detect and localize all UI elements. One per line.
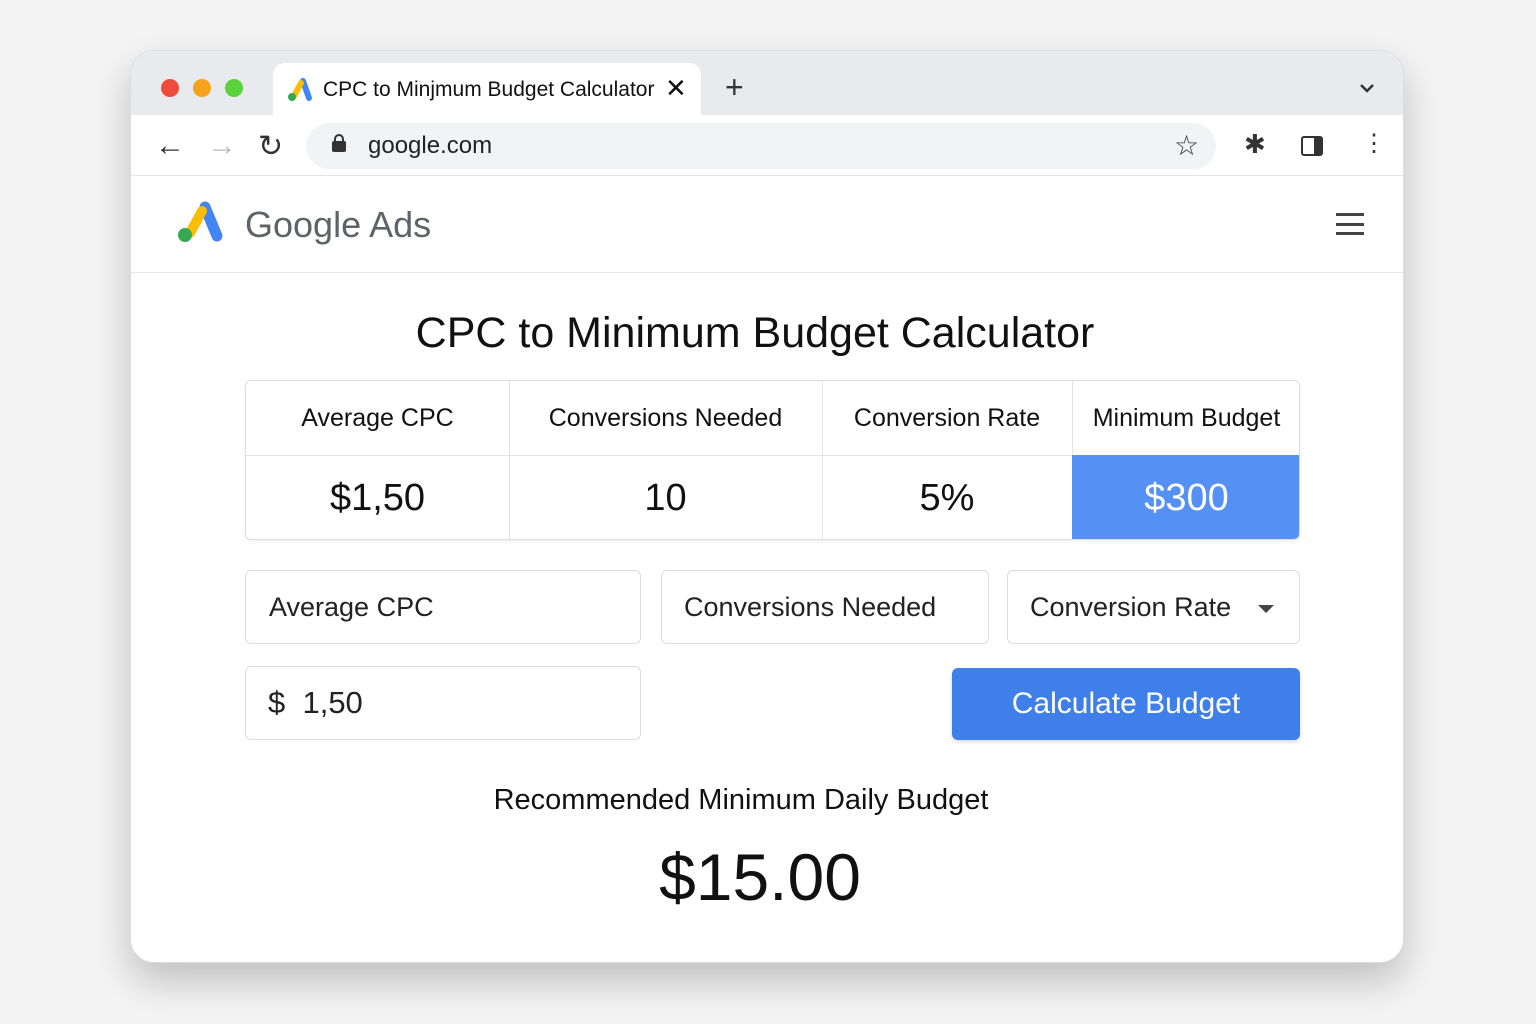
nav icons: ← bbox=[155, 129, 185, 162]
active tab bbox=[273, 63, 701, 115]
toolbar bbox=[131, 115, 1405, 176]
google ads logo bbox=[178, 202, 222, 242]
input: average cpc: Average CPC bbox=[269, 592, 434, 622]
results table bbox=[245, 380, 1300, 540]
toolbar: ⋮ bbox=[1362, 130, 1386, 157]
results table: 10 bbox=[644, 476, 687, 518]
toolbar: ↻ bbox=[258, 130, 283, 163]
dropdown: conversion rate bbox=[1007, 570, 1300, 644]
tab menu chevron bbox=[1360, 84, 1374, 93]
site header: Google Ads bbox=[245, 204, 431, 245]
results table: Conversions Needed bbox=[549, 404, 782, 432]
input: conversions needed bbox=[661, 570, 989, 644]
title: CPC to Minimum Budget Calculator bbox=[416, 308, 1094, 356]
hamburger menu bbox=[1336, 213, 1364, 235]
results table: Conversion Rate bbox=[854, 404, 1040, 432]
site header bbox=[131, 175, 1405, 273]
button: calculate budget: Calculate Budget bbox=[1012, 687, 1240, 720]
omnibox: google.com bbox=[368, 132, 492, 159]
omnibox: ☆ bbox=[1174, 130, 1199, 161]
active tab: CPC to Minjmum Budget Calculator bbox=[323, 78, 654, 101]
input: conversions needed: Conversions Needed bbox=[684, 592, 936, 622]
results table: 5% bbox=[920, 476, 974, 518]
traffic lights bbox=[161, 79, 243, 97]
input: cpc value: $ 1,50 bbox=[268, 685, 363, 720]
browser window bbox=[130, 50, 1404, 963]
dropdown: conversion rate: Conversion Rate bbox=[1030, 592, 1231, 622]
extension icons: ✱ bbox=[1244, 129, 1266, 159]
omnibox bbox=[306, 123, 1216, 169]
result label: Recommended Minimum Daily Budget bbox=[494, 784, 988, 816]
input: cpc value bbox=[245, 666, 641, 740]
results table: $300 bbox=[1144, 476, 1229, 518]
results table: Minimum Budget bbox=[1093, 404, 1280, 432]
tab bar bbox=[131, 51, 1405, 115]
new tab: + bbox=[725, 69, 744, 105]
results table: $1,50 bbox=[330, 476, 425, 518]
input: average cpc bbox=[245, 570, 641, 644]
button: calculate budget bbox=[952, 668, 1300, 740]
active tab: ✕ bbox=[665, 73, 687, 103]
results table: Average CPC bbox=[301, 404, 454, 432]
result value: $15.00 bbox=[659, 840, 861, 914]
toolbar: → bbox=[207, 129, 237, 162]
